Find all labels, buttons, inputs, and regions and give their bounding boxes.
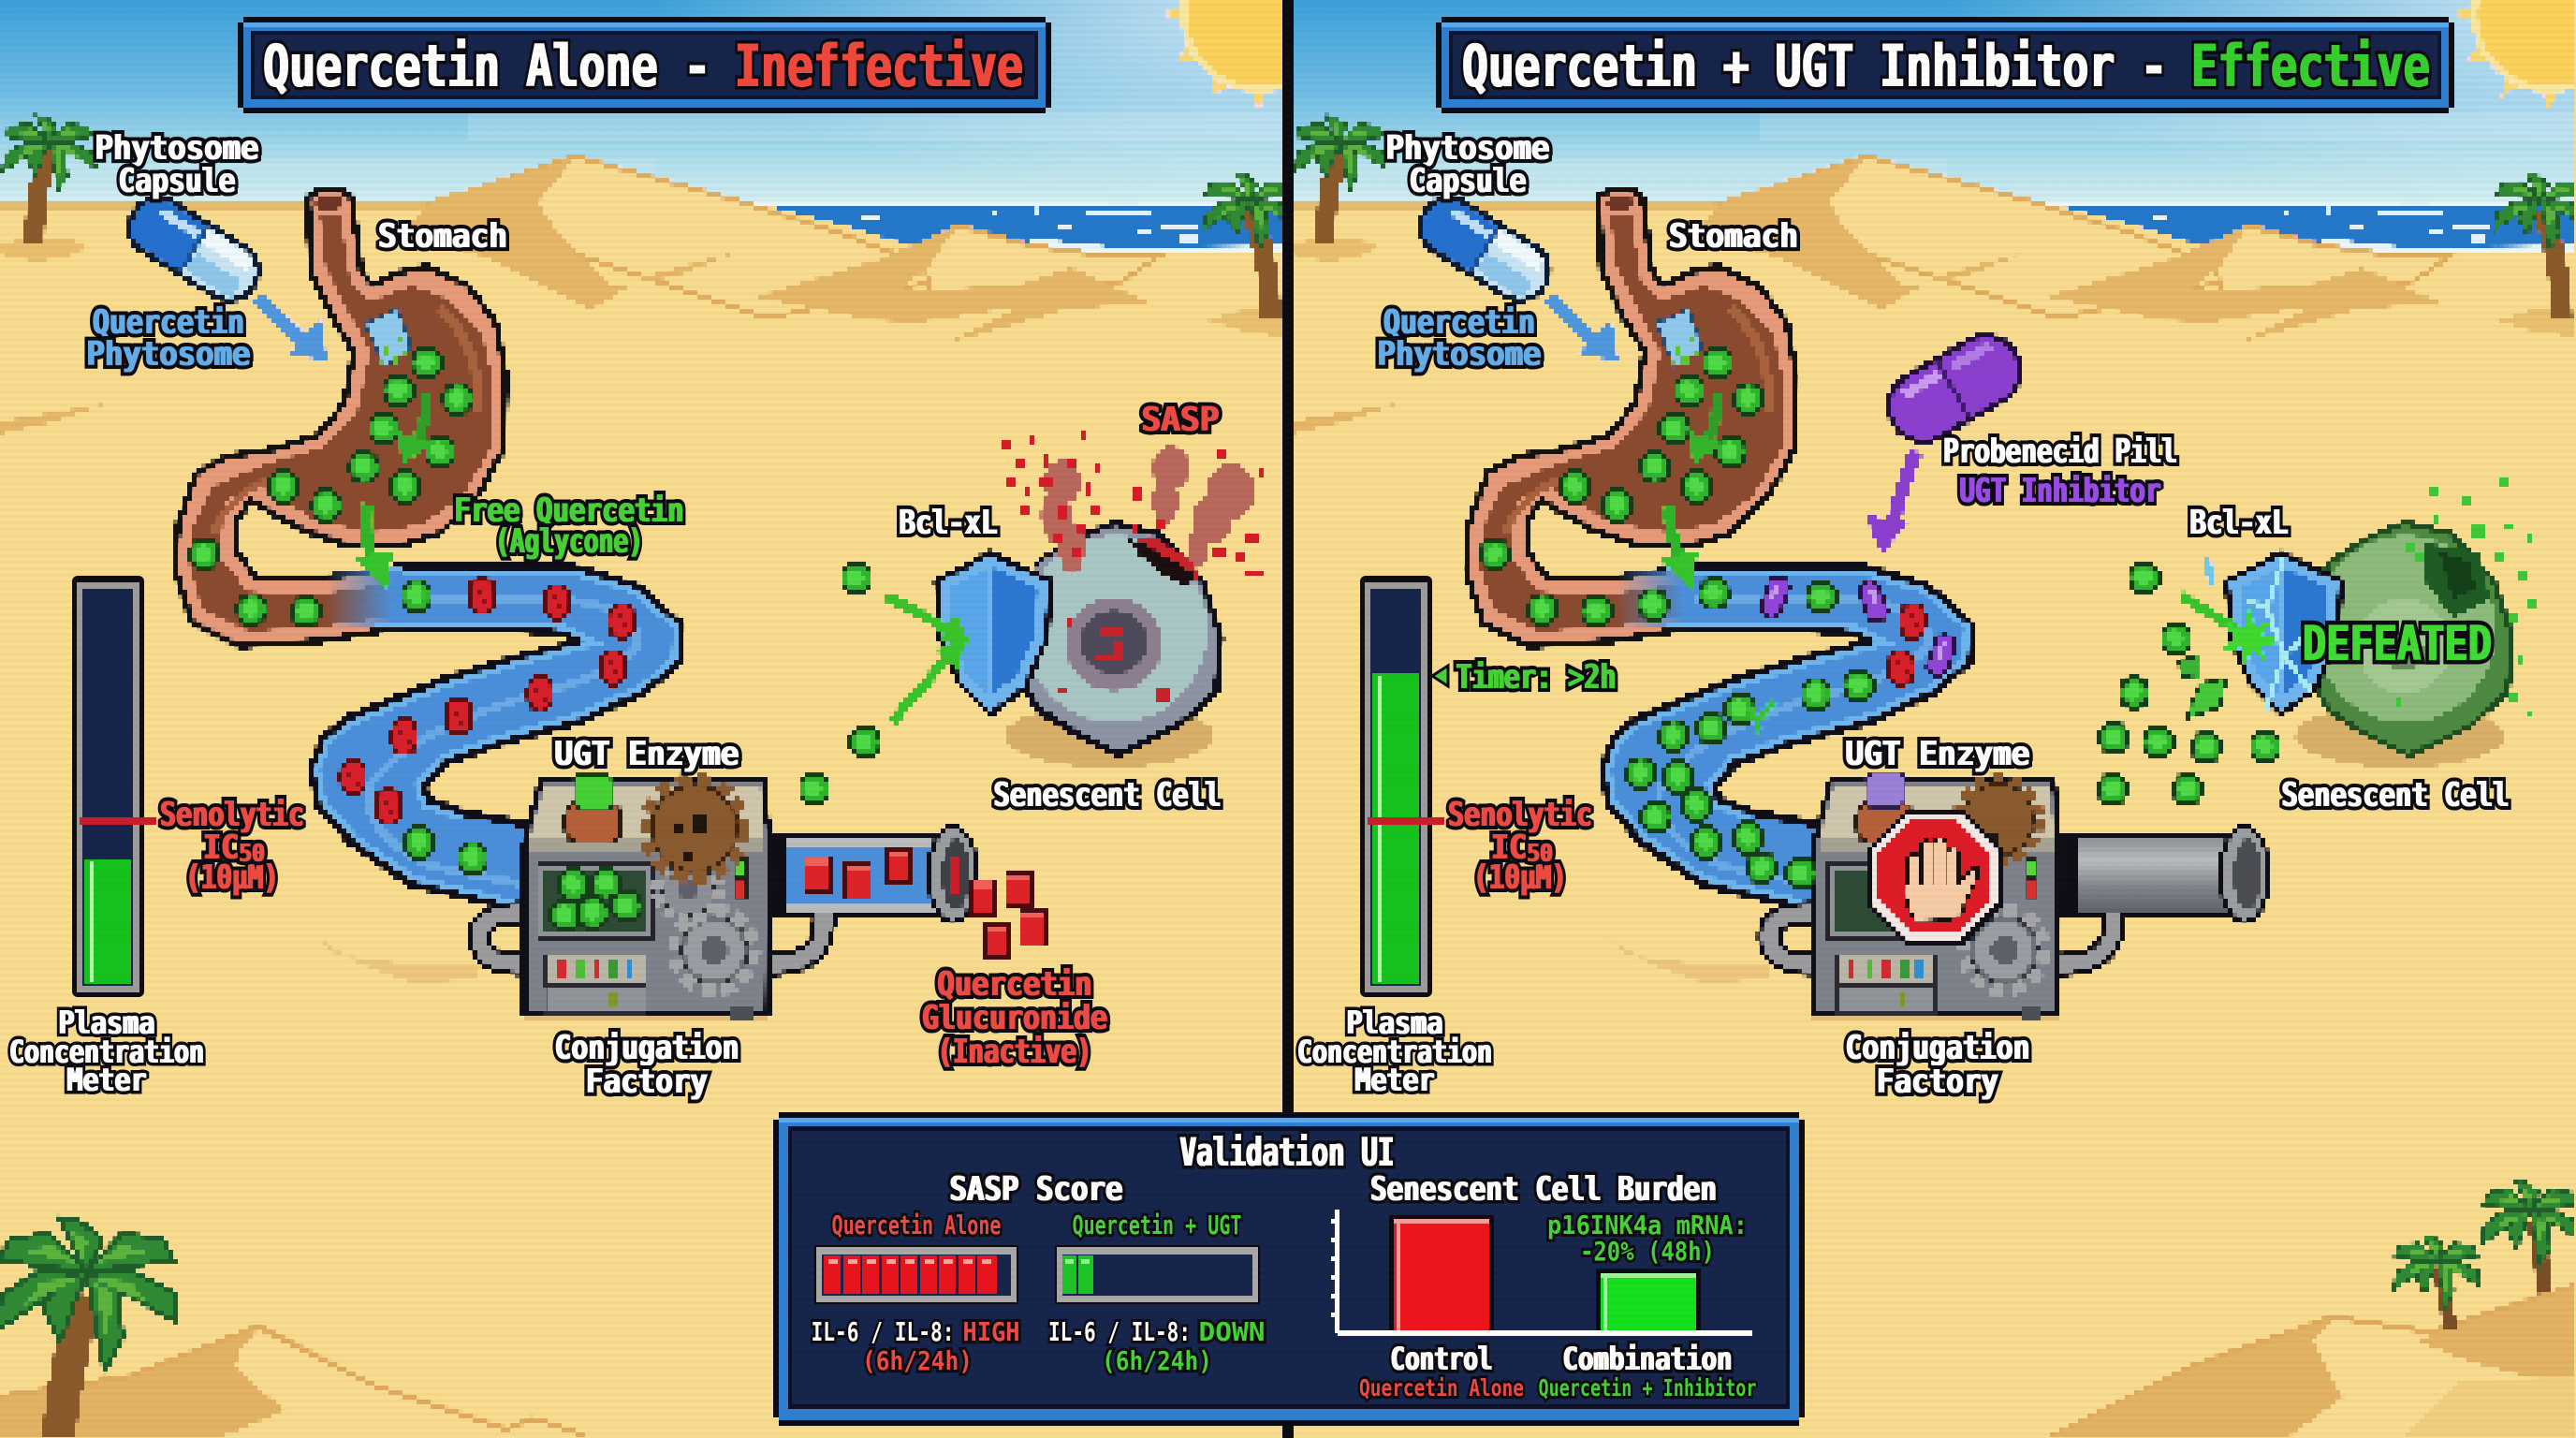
label: senescent cell: Senescent Cell [2282,776,2509,814]
free quercetin and glucuronide particles in intestine [339,577,636,874]
title: quercetin alone: Quercetin Alone - [263,32,710,100]
label: conjugation factory: Conjugation [554,1029,739,1067]
sasp bar: quercetin plus ugt [1055,1210,1260,1304]
label: ugt enzyme: UGT Enzyme [554,735,739,773]
bottom right dunes and palms [2048,1181,2576,1438]
enzyme button [1857,773,1913,843]
label: senolytic ic50: Senolytic [1448,796,1592,834]
label: plasma concentration meter [9,1005,204,1099]
heading: sasp score: SASP Score [949,1170,1123,1209]
rusty gear enzyme [645,779,744,878]
stop sign with hand [1867,810,2002,945]
label: senolytic ic50: 50 [1527,840,1553,868]
label: defeated: DEFEATED [2303,616,2492,672]
label: conjugation factory [554,1029,739,1101]
label: quercetin phytosome: Quercetin [93,303,244,342]
rusty gear enzyme [1957,778,2040,860]
label: plasma concentration meter: Plasma [1346,1005,1443,1042]
senescent cell [1004,522,1222,768]
label: plasma concentration meter: Plasma [58,1005,155,1042]
label: phytosome capsule [1385,129,1550,200]
stomach [175,190,505,646]
bottom left dune and palm [0,1217,583,1438]
intestine [312,567,681,913]
label: phytosome capsule: Capsule [118,162,236,200]
arrow: capsule to stomach [258,298,328,361]
output tube with inactive glucuronide [768,827,977,922]
shattered bcl-xl shield [2203,552,2341,714]
label: probenecid pill ugt inhibitor [1943,433,2177,510]
title: quercetin plus ugt inhibitor: Quercetin + UGT Inhibitor - [1462,32,2167,100]
inactive glucuronide particles [968,871,1046,961]
panel: validation ui [773,1112,1805,1426]
heading: senescent cell burden: Senescent Cell Burden [1370,1170,1717,1209]
sasp bar: quercetin plus ugt: Quercetin + UGT [1073,1210,1241,1240]
label: quercetin phytosome: Quercetin [1383,303,1535,342]
desert background [1294,0,2574,983]
center divider [1282,0,1294,1438]
label: plasma concentration meter: Meter [1355,1062,1434,1099]
arrow: pill to intestine [1865,451,1916,554]
label: senolytic ic50: IC [203,829,243,867]
screen with quercetin [538,862,653,940]
callout: p16ink4a mrna: -20% (48h) [1580,1236,1715,1267]
title: quercetin plus ugt inhibitor: Effective [2191,32,2430,100]
label: senolytic ic50: Senolytic [160,796,304,834]
screen [1828,862,1943,940]
title: quercetin plus ugt inhibitor [1436,17,2454,113]
callout: p16ink4a mrna: p16INK4a mRNA: [1547,1210,1748,1240]
label: conjugation factory: Factory [1877,1063,1998,1101]
panel: quercetin plus ugt inhibitor [1294,0,2574,1103]
label: phytosome capsule [95,129,258,200]
label: senolytic ic50: 50 [239,840,265,868]
label: plasma concentration meter: Concentration [9,1034,204,1071]
readout: il-6 il-8 high: (6h/24h) [862,1345,973,1376]
readout: il-6 il-8 down: IL-6 / IL-8: [1048,1316,1191,1347]
label: senolytic ic50: IC [1491,829,1531,867]
readout: il-6 il-8 down [1048,1316,1266,1376]
conjugation factory [479,775,824,1022]
conjugation factory blocked [1769,773,2114,1022]
label: stomach: Stomach [1669,217,1798,256]
bottom dunes and palms [0,1181,2576,1438]
label: bcl-xl: Bcl-xL [899,504,998,542]
label: free quercetin [455,492,683,561]
timer label: Timer: >2h [1456,658,1616,697]
label: free quercetin: Free Quercetin [455,492,683,530]
label: senescent cell: Senescent Cell [994,776,1221,814]
label: sasp: SASP [1142,401,1219,439]
attacking quercetin wave [2097,561,2283,806]
intestine [1603,567,1972,913]
label: quercetin phytosome [1378,303,1541,374]
label: quercetin phytosome: Phytosome [86,335,251,374]
green debris particles [2394,476,2537,717]
sasp bar: quercetin alone: Quercetin Alone [831,1210,1002,1240]
label: conjugation factory: Conjugation [1846,1029,2029,1067]
label: quercetin glucuronide: Glucuronide [922,999,1107,1037]
readout: il-6 il-8 high [811,1316,1020,1376]
label: probenecid pill ugt inhibitor: Probenecid Pill [1943,433,2177,471]
label: quercetin glucuronide: Quercetin [938,965,1091,1004]
label: phytosome capsule: Phytosome [1385,129,1550,168]
label: senolytic ic50 [160,796,304,897]
blocked free quercetin and arrows [798,562,970,806]
label: bcl-xl: Bcl-xL [2190,504,2288,542]
label: senolytic ic50: (10µM) [185,858,279,897]
title: quercetin alone [238,17,1051,113]
enzyme button [565,775,622,843]
chart label: combination [1539,1341,1756,1401]
plasma concentration meter [1360,576,1444,997]
label: free quercetin: (Aglycone) [495,522,643,561]
chart label: control [1359,1341,1524,1401]
heading: validation ui: Validation UI [1179,1129,1395,1175]
blend from stomach to intestine [1617,567,1695,626]
label: quercetin phytosome [86,303,251,374]
readout: il-6 il-8 down: (6h/24h) [1102,1345,1212,1376]
scene art: quercetin alone [0,0,1282,1020]
label: plasma concentration meter: Meter [67,1062,146,1099]
label: senolytic ic50 [1448,796,1592,897]
last quercetin entering factory [1785,857,1817,890]
icon: phytosome capsule [1410,187,1559,311]
label: plasma concentration meter: Concentration [1297,1034,1492,1071]
label: senolytic ic50: (10µM) [1473,858,1567,897]
bcl-xl shield [936,552,1050,714]
label: quercetin glucuronide [922,965,1107,1071]
small gear [657,858,719,920]
label: probenecid pill ugt inhibitor: UGT Inhibitor [1960,472,2160,510]
chart label: control: Quercetin Alone [1359,1374,1524,1401]
bar chart: senescent cell burden [1331,1210,1752,1336]
icon: phytosome capsule [119,187,269,311]
plasma concentration meter [72,576,156,997]
stomach [1466,190,1796,646]
blend from stomach to intestine [326,567,404,626]
desert background [0,0,1282,983]
icon: probenecid pill [1877,323,2032,454]
label: phytosome capsule: Phytosome [95,129,258,168]
label: plasma concentration meter [1297,1005,1492,1099]
label: quercetin glucuronide: (Inactive) [938,1033,1091,1071]
title: quercetin alone: Ineffective [735,32,1023,100]
callout: p16ink4a mrna [1547,1210,1748,1267]
label: conjugation factory [1846,1029,2029,1101]
arrow: stomach to intestine [1659,507,1698,590]
panel: quercetin alone [0,0,1282,1103]
defeated senescent cell [2295,522,2512,768]
chart label: combination: Combination [1563,1341,1732,1378]
scene art: quercetin plus ugt inhibitor [1294,0,2574,1020]
readout: il-6 il-8 high: IL-6 / IL-8: [811,1316,955,1347]
label: stomach: Stomach [378,217,507,256]
label: conjugation factory: Factory [586,1063,708,1101]
empty output tube [2057,827,2269,922]
label: phytosome capsule: Capsule [1410,162,1526,200]
readout: il-6 il-8 high: HIGH [962,1316,1020,1347]
particles in intestine [1625,575,1958,885]
chart label: combination: Quercetin + Inhibitor [1539,1374,1756,1401]
arrow: stomach to intestine [354,504,393,590]
arrow: capsule to stomach [1549,298,1618,361]
sasp bar: quercetin alone [814,1210,1018,1304]
readout: il-6 il-8 down: DOWN [1198,1316,1266,1347]
chart label: control: Control [1391,1341,1492,1378]
label: ugt enzyme: UGT Enzyme [1846,735,2029,773]
sasp plumes and particles [1003,433,1265,582]
label: quercetin phytosome: Phytosome [1378,335,1541,374]
